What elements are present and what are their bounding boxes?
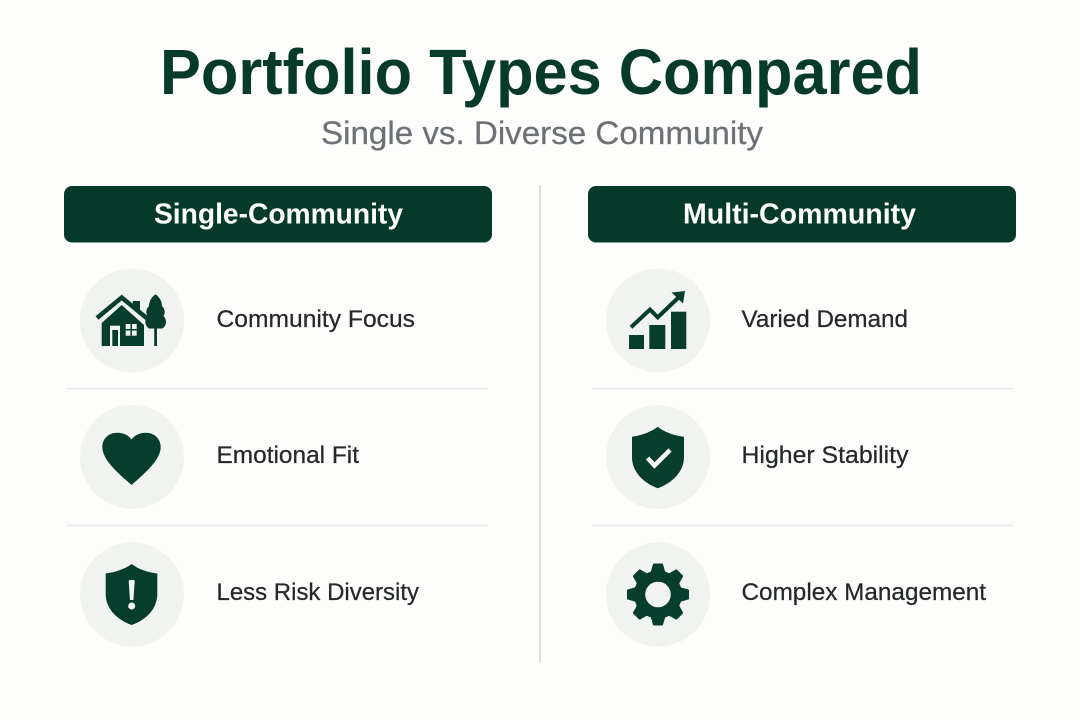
row: higher stability <box>606 405 909 509</box>
header: single-community <box>64 186 492 242</box>
icon: house and tree <box>97 294 166 346</box>
row: community focus <box>80 268 415 372</box>
panel: multi-community <box>588 186 1016 646</box>
header: single-community: Single-Community <box>154 198 403 230</box>
icon: heart <box>102 433 161 485</box>
icon: shield with check <box>632 427 684 488</box>
label: Complex Management <box>742 579 986 606</box>
row: complex management <box>606 542 986 646</box>
icon: shield with exclamation <box>106 564 157 625</box>
icon: rising bar chart <box>629 291 686 349</box>
label: Less Risk Diversity <box>216 579 420 606</box>
subtitle: Single vs. Diverse Community <box>321 115 763 151</box>
icon: gear <box>627 564 689 626</box>
label: Higher Stability <box>742 442 909 469</box>
panel: single-community <box>64 186 492 646</box>
row: less risk diversity <box>80 542 420 646</box>
title: Portfolio Types Compared <box>160 36 922 108</box>
label: Community Focus <box>216 306 415 333</box>
label: Emotional Fit <box>216 442 359 469</box>
header: multi-community: Multi-Community <box>683 198 916 230</box>
label: Varied Demand <box>742 306 908 333</box>
row: varied demand <box>606 268 908 372</box>
header: multi-community <box>588 186 1016 242</box>
row: emotional fit <box>80 405 359 509</box>
